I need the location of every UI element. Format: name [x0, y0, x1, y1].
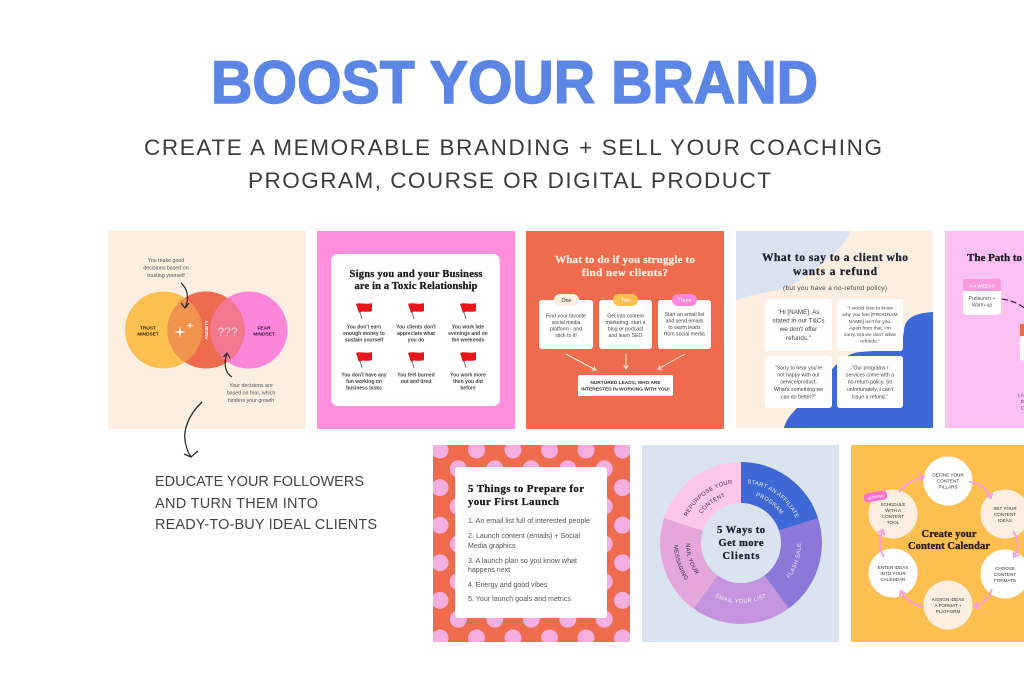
flag captions: You work late [452, 324, 484, 330]
reply text: "Our programs / [852, 366, 889, 372]
bottom note: based on fear, which [227, 390, 275, 396]
heading [555, 254, 696, 279]
donut centre title: 5 Ways to [717, 525, 765, 536]
donut labels: START AN AFFILIATE [748, 480, 800, 518]
bottom note: Your decisions are [229, 383, 273, 389]
flag captions: enough money to [343, 331, 385, 337]
panel: path to launch (cropped) [945, 231, 1024, 428]
cycle labels: ENTER IDEAS [878, 565, 908, 570]
step text: marketing, start a [605, 320, 646, 326]
week box [963, 279, 1001, 315]
top note: You make good [148, 258, 184, 264]
donut centre title [717, 525, 765, 562]
week box: Prelaunch + [969, 296, 995, 302]
venn circles [125, 292, 288, 368]
arrow: large hand-drawn arrow [184, 402, 202, 457]
subtitle: CREATE A MEMORABLE BRANDING + SELL YOUR COACHING [144, 135, 882, 160]
flag captions: evenings and on [448, 331, 488, 337]
venn labels: ANXIETY [204, 320, 209, 340]
heading [468, 483, 584, 508]
step text: to warm leads [668, 325, 701, 331]
cycle labels: ASSIGN IDEAS [932, 597, 964, 602]
centre heading: Create your [922, 529, 977, 540]
week box: Warm-up [972, 302, 992, 308]
top note: trusting yourself [147, 273, 185, 279]
flag captions: fun working on [346, 379, 382, 385]
cycle labels: IDEAS [998, 518, 1012, 523]
heading: Signs you and your Business [350, 269, 482, 280]
arrow: top note to overlap [181, 283, 189, 308]
flag captions: the weekends [452, 338, 485, 344]
cycle labels: CHOOSE [995, 566, 1015, 571]
venn labels: MINDSET [253, 332, 275, 338]
heading: are in a Toxic Relationship [354, 281, 478, 292]
cycle labels [878, 472, 1017, 614]
cycle circles [868, 456, 1024, 630]
venn labels: TRUST [140, 326, 156, 332]
reply text [772, 306, 898, 400]
step pills: Two [621, 298, 630, 304]
donut labels [674, 480, 801, 603]
subtitle [144, 135, 882, 193]
reply text: "I would love to know [847, 306, 893, 312]
flag captions: You feel burned [397, 372, 435, 378]
step text: Start an email list [665, 312, 705, 318]
flag captions: You clients don't [396, 324, 436, 330]
next box [1020, 324, 1024, 361]
list: happens next [468, 567, 510, 574]
reply cards [765, 299, 903, 408]
reply text: What's something we [774, 387, 823, 393]
optional tag [863, 490, 888, 503]
cycle labels: SCHEDULE [880, 502, 906, 507]
flag captions: appreciate what [397, 331, 435, 337]
text: educate your followers [155, 474, 377, 533]
step text: from social media [664, 332, 705, 338]
list: 1. An email list full of interested people [468, 518, 590, 525]
arrows to result [566, 354, 685, 370]
list: Media graphics [468, 543, 516, 550]
step text: Get into content [607, 314, 644, 320]
panel: trust vs fear venn diagram [108, 231, 306, 429]
cycle labels: A FORMAT + [934, 603, 962, 608]
donut labels: FLASH SALE [786, 543, 801, 578]
reply text: stated in our T&Cs [772, 318, 825, 324]
donut labels: EMAIL YOUR LIST [716, 594, 766, 603]
flag captions: then you did [453, 379, 483, 385]
text: educate your followers: AND TURN THEM INTO [155, 496, 318, 512]
panel: 5 things to prepare [433, 445, 630, 642]
donut labels: NAIL YOUR [686, 544, 699, 574]
list [468, 518, 590, 603]
heading: find new clients? [582, 267, 668, 279]
heading [350, 269, 482, 292]
donut labels: REPURPOSE YOUR [684, 480, 732, 516]
step text: and learn SEO [608, 333, 643, 339]
flag captions: business tasks [346, 386, 382, 392]
reply text: can do better?" [781, 394, 816, 400]
flag captions: sustain yourself [345, 338, 384, 344]
cycle labels: SET YOUR [993, 506, 1017, 511]
panel: struggle to find clients [526, 231, 724, 429]
cycle labels: WITH A [885, 508, 902, 513]
text: educate your followers: READY-TO-BUY IDEAL CLIENTS [155, 517, 377, 533]
flag captions: before [460, 386, 476, 392]
reply text: issue a refund." [852, 394, 888, 400]
step pills: One [561, 298, 572, 304]
venn labels: FEAR [257, 326, 271, 332]
cycle labels: INTO YOUR [880, 571, 906, 576]
reply text: we don't offer [779, 326, 817, 333]
subheading: (but you have a no-refund policy) [783, 285, 887, 292]
list: 3. A launch plan so you know what [468, 558, 577, 565]
donut chart [660, 462, 822, 624]
heading: wants a refund [793, 266, 878, 278]
week box: 3-4 WEEKS [969, 283, 996, 289]
text: educate your followers: EDUCATE YOUR FOLLOWERS [155, 474, 364, 490]
result box [578, 375, 673, 396]
reply text: sorry, but we don't allow [844, 332, 896, 338]
panel: refund [736, 231, 933, 428]
flags [356, 303, 476, 368]
reply text: no-return policy. So [848, 380, 892, 386]
top note: decisions based on [143, 266, 189, 272]
centre heading: Content Calendar [908, 541, 990, 552]
flag captions: You don't earn [347, 324, 381, 330]
cycle labels: CONTENT [937, 478, 959, 484]
step text: stick to it! [555, 333, 577, 339]
donut labels: MESSAGING [674, 545, 688, 580]
step text: Find your favorite [546, 314, 586, 320]
step text [546, 312, 705, 339]
step cards [539, 300, 711, 349]
reply text: service/product. [780, 380, 817, 386]
heading: 5 Things to Prepare for [468, 483, 584, 495]
heading: What to do if you struggle to [555, 254, 696, 266]
dashed path [1002, 299, 1024, 309]
flag captions: You work more [450, 372, 486, 378]
cropped label [1018, 394, 1024, 410]
panel: content calendar [851, 445, 1024, 642]
donut centre title: Clients [722, 551, 760, 562]
cycle labels: CALENDAR [880, 577, 906, 582]
bottom note [227, 383, 275, 404]
result box: NURTURED LEADS, WHO ARE [590, 380, 661, 386]
cycle labels: DEFINE YOUR [932, 472, 964, 478]
step text: social media [552, 320, 581, 326]
reply text: services come with a [846, 372, 894, 378]
arrow: bottom note to overlap [224, 353, 232, 377]
reply text: unfortunately, I can't [847, 387, 894, 393]
cycle arrows [880, 477, 1018, 607]
heading: your First Launch [468, 496, 559, 508]
donut labels: CONTENT [699, 492, 724, 513]
top note [143, 258, 189, 279]
reply text: refunds." [786, 335, 811, 342]
venn labels [137, 320, 275, 340]
venn labels: ??? [217, 325, 238, 339]
reply text: NAME] isn't for you. [848, 319, 892, 325]
centre heading [908, 530, 990, 550]
heading [762, 252, 908, 278]
reply text: Apart from that, I'm [849, 326, 891, 332]
donut centre title: Get more [718, 538, 764, 549]
cropped label: LA [1018, 392, 1024, 398]
subtitle: PROGRAM, COURSE OR DIGITAL PRODUCT [248, 168, 771, 193]
bottom note: hinders your growth [228, 398, 274, 404]
title: BOOST YOUR BRAND [211, 49, 818, 116]
result box: INTERESTED IN WORKING WITH YOU! [581, 386, 670, 392]
donut labels: PROGRAM [756, 492, 784, 514]
heading: What to say to a client who [762, 252, 908, 264]
cycle labels: PILLARS [939, 484, 957, 490]
flag captions: you do [408, 338, 424, 344]
optional tag: optional [867, 493, 884, 501]
flag captions: out and tired [401, 379, 431, 385]
cycle labels: CONTENT [994, 572, 1016, 577]
reply text: refunds." [860, 338, 880, 344]
reply text: not happy with our [777, 372, 820, 378]
cycle labels: CONTENT [994, 512, 1016, 517]
list: 5. Your launch goals and metrics [468, 596, 571, 603]
list: 4. Energy and good vibes [468, 582, 548, 589]
step pills [554, 294, 697, 306]
cycle labels: TOOL [887, 520, 900, 525]
reply text: "Hi [NAME]. As [777, 309, 820, 316]
cycle labels: PLATFORM [936, 609, 961, 614]
flag captions: You don't have any [341, 372, 387, 378]
panel: toxic relationship [317, 231, 515, 429]
panel: 5 ways to get more clients [642, 445, 839, 642]
reply text: why you feel [PROGRAM [842, 312, 898, 318]
step text: platform - and [550, 326, 582, 332]
reply text: "Sorry to hear you're [775, 366, 822, 372]
flag captions [341, 324, 488, 392]
cycle labels: CONTENT [882, 514, 904, 519]
step pills: Three [678, 298, 691, 304]
cycle labels: FORMATS [994, 578, 1016, 583]
list: 2. Launch content (emails) + Social [468, 533, 580, 540]
step text: and send emails [666, 318, 704, 324]
venn labels: MINDSET [137, 332, 159, 338]
heading: The Path to [967, 252, 1022, 264]
step text: blog or podcast [608, 326, 644, 332]
